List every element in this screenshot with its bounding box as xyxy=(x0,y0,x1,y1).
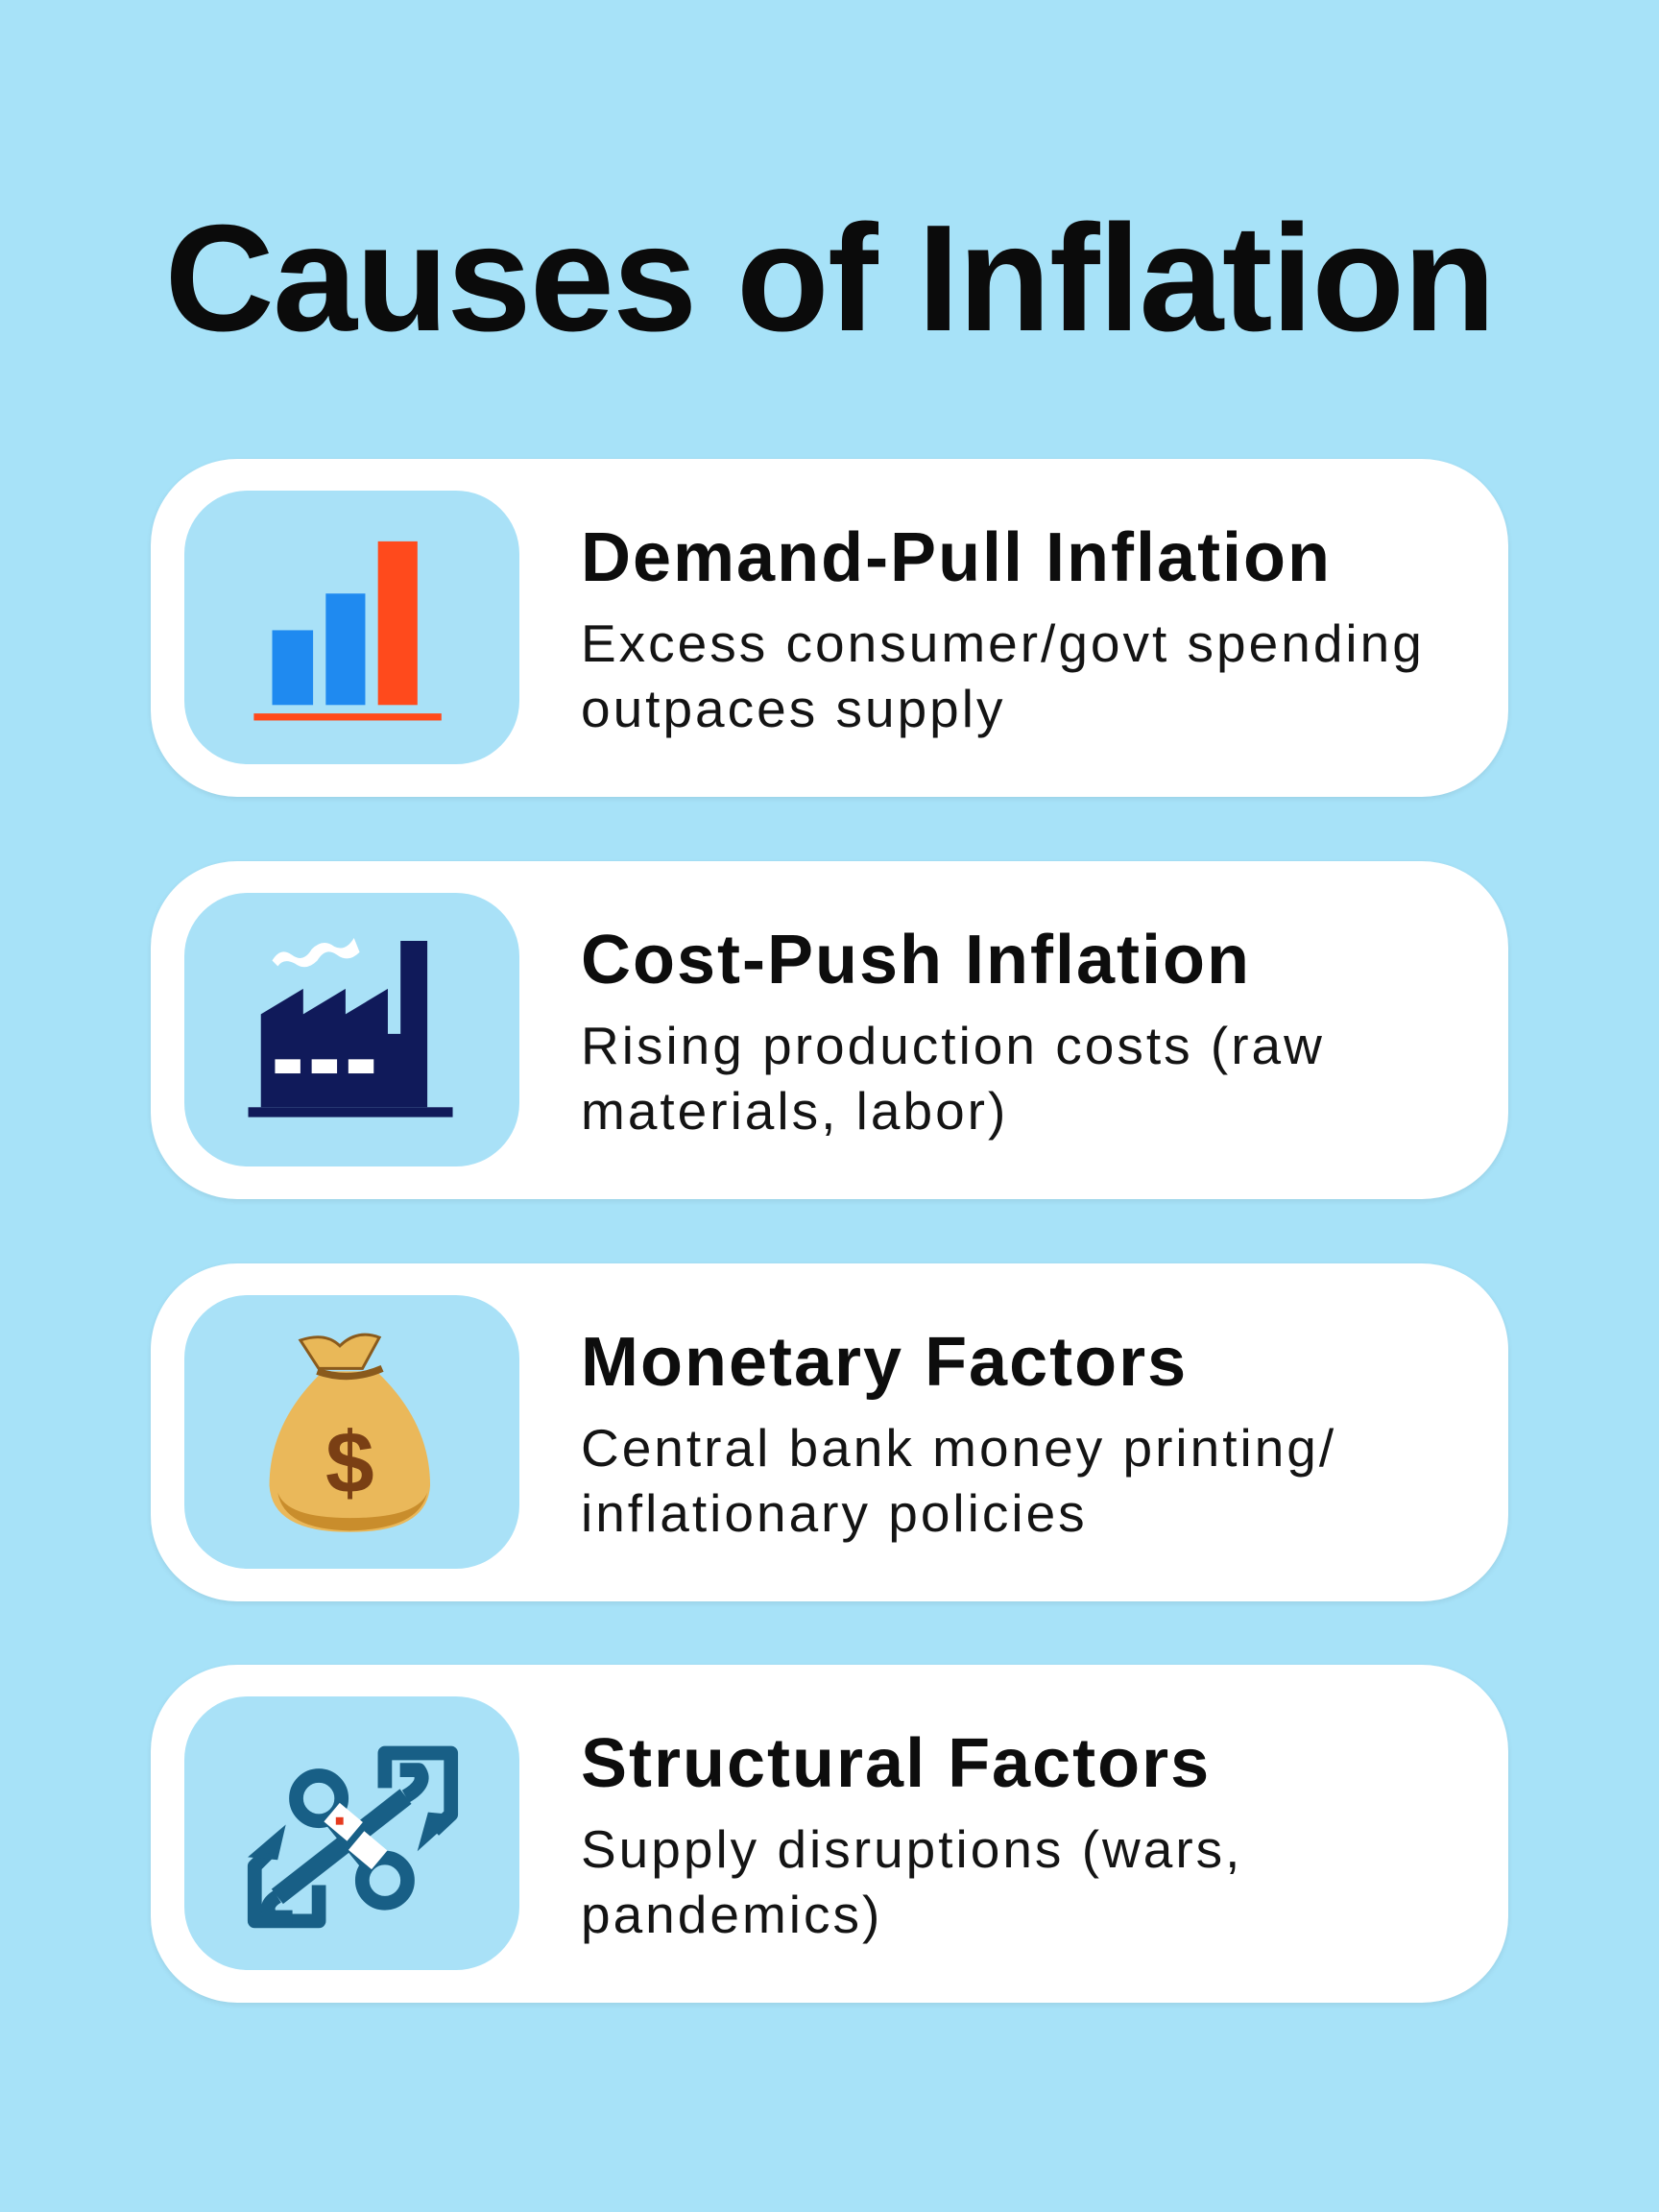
icon: money bag: $ xyxy=(325,1415,374,1512)
heading: Monetary Factors xyxy=(581,1324,1188,1401)
icon: bar chart xyxy=(184,491,519,764)
panel: cost-push xyxy=(151,861,1508,1199)
icon: broken supply chain xyxy=(184,1696,519,1970)
heading: Structural Factors xyxy=(581,1725,1211,1802)
description xyxy=(581,1016,1325,1141)
panel: demand-pull xyxy=(151,459,1508,797)
description: Excess consumer/govt spending xyxy=(581,613,1425,673)
heading: Demand-Pull Inflation xyxy=(581,519,1332,596)
description: materials, labor) xyxy=(581,1081,1008,1141)
heading: Cost-Push Inflation xyxy=(581,922,1251,998)
description: Central bank money printing/ xyxy=(581,1418,1336,1478)
icon: money bag xyxy=(184,1295,519,1569)
description: inflationary policies xyxy=(581,1483,1088,1543)
description xyxy=(581,613,1425,738)
description: outpaces supply xyxy=(581,679,1006,738)
panel: structural xyxy=(151,1665,1508,2003)
description xyxy=(581,1418,1336,1543)
description: Rising production costs (raw xyxy=(581,1016,1325,1075)
description xyxy=(581,1819,1242,1944)
title: Causes of Inflation xyxy=(165,194,1494,363)
description: pandemics) xyxy=(581,1885,882,1944)
panel: monetary xyxy=(151,1263,1508,1601)
description: Supply disruptions (wars, xyxy=(581,1819,1242,1879)
icon: factory xyxy=(184,893,519,1166)
